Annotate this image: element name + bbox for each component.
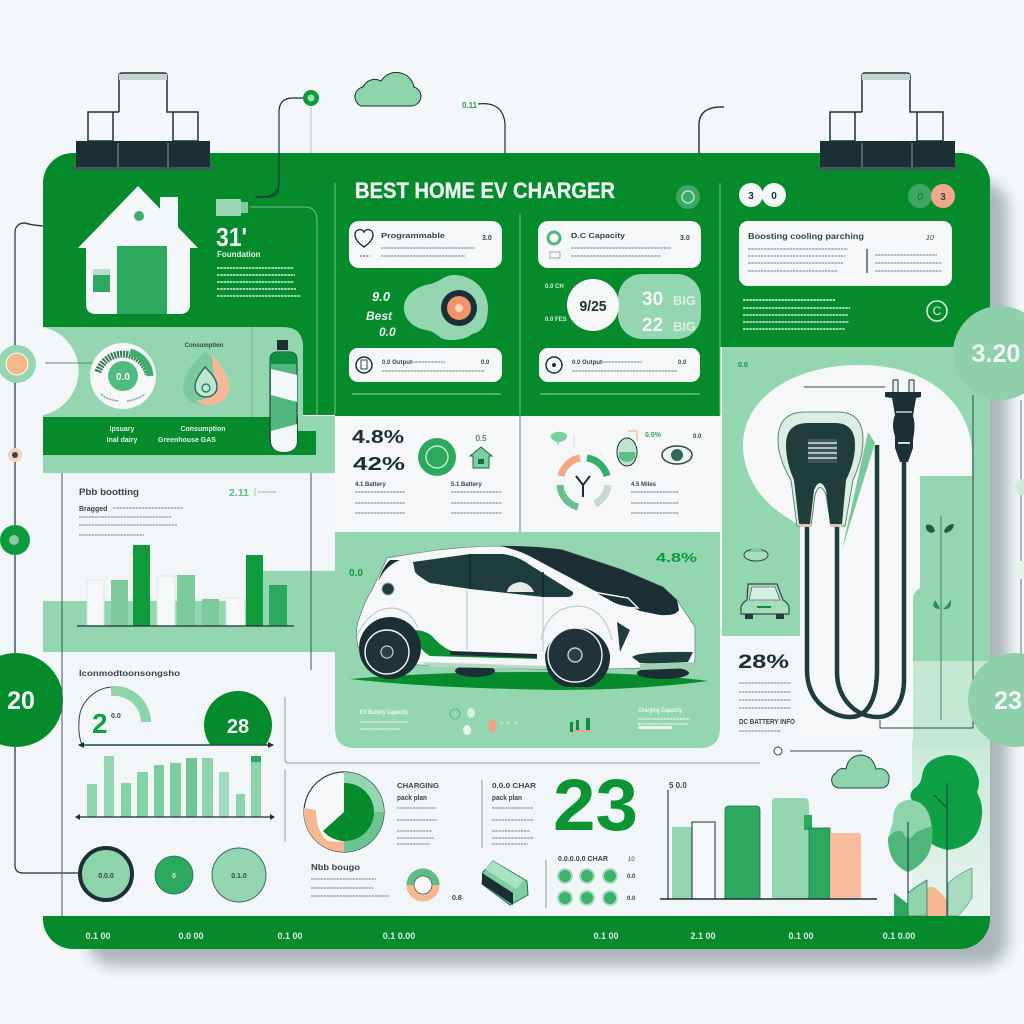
icons: grid of six: [558, 856, 636, 905]
footer labels: 0.1 0.00: [883, 931, 915, 941]
stat pill: charge values: 9/25: [580, 298, 606, 315]
text: car notes left: EV Battery Capacity: [360, 710, 409, 716]
panel: stats left white: 5.1 Battery: [451, 482, 482, 488]
panel: stats left white: [335, 416, 519, 532]
text: donut legend: CHARGING: [397, 783, 440, 790]
badge: 20 left: 20: [7, 687, 35, 715]
chart: top left bar chart: Bragged: [79, 506, 107, 513]
panel: stats left white: 42%: [353, 454, 405, 474]
stat pill: charge values: [545, 274, 701, 339]
icons: grid of six: 0.0: [627, 896, 636, 902]
icon: battery bottle: [270, 340, 297, 452]
clamp: left: [72, 73, 215, 170]
text: donut legend: pack plan: [397, 795, 427, 802]
card: top right: 3.0: [680, 235, 690, 242]
stat: house figure: [216, 222, 301, 296]
icon: house: [78, 186, 198, 314]
card: top right: D.C Capacity: [571, 233, 625, 240]
card: top right: [538, 221, 701, 268]
connector: left timeline: [0, 223, 78, 873]
icon: small car: [744, 548, 768, 561]
text: car notes left: [360, 710, 409, 729]
card: mid left: 0.0: [481, 360, 490, 366]
blob: charge indicator: 9.0: [372, 289, 391, 304]
chart: small ring: [410, 872, 462, 902]
stat: house figure: Foundation: [217, 250, 261, 259]
chart: top left bar chart: 2.11: [229, 488, 249, 499]
stat: 23: 23: [553, 765, 638, 846]
panel: stats right white: 0.0: [693, 434, 702, 440]
icon: trees: [888, 755, 982, 916]
circles: three stats: [80, 848, 266, 902]
card: right top: [739, 221, 952, 286]
footer labels: 0.0 00: [178, 931, 204, 941]
circles: three stats: 0.1.0: [231, 873, 247, 880]
divider lines: green area: [335, 183, 720, 415]
panel: stats left white: 0.5: [475, 434, 487, 443]
panel: car section: [335, 532, 720, 748]
chart: small ring: 0.8: [452, 895, 462, 902]
connector: right node line: [1014, 400, 1024, 660]
clamp: right: [817, 73, 958, 170]
panel: green label band: [43, 416, 335, 455]
stat: 28%: 28%: [738, 652, 789, 673]
gauge: half circle and value: 28: [227, 716, 249, 738]
footer labels: 0.1 00: [277, 931, 303, 941]
badge: 23 right: [968, 653, 1024, 747]
card: top left: Programmable: [381, 233, 445, 240]
chart: top left bar chart: [77, 487, 294, 626]
hr: [352, 393, 700, 395]
stat pill: charge values: 22: [642, 315, 663, 336]
stat pill: charge values: 0.0 CH: [545, 284, 564, 290]
icon: bottom cloud: [832, 755, 889, 788]
panel: charger illustration: 0.0: [738, 362, 748, 369]
panel: top right green badges: 3: [748, 191, 754, 202]
text: car notes right: Charging Capacity: [638, 708, 683, 714]
stat pill: charge values: 0.0 FES: [545, 317, 567, 323]
text: small note: Nbb bougo: [311, 863, 360, 872]
panel: charger illustration: [738, 362, 990, 755]
badge: 3.20: [953, 306, 1024, 400]
badge: 3.20: 3.20: [972, 340, 1020, 368]
icons: grid of six: 0.0: [627, 874, 636, 880]
panel: stats left white: 4.8%: [352, 427, 404, 447]
title: BEST HOME EV CHARGER: [355, 178, 615, 203]
connector: top center: [478, 104, 505, 153]
icons: grid of six: 0.0.0.0.0 CHAR: [558, 856, 608, 863]
chart: right bar chart: 5 0.0: [669, 781, 687, 790]
gauge: speed dial: [560, 458, 608, 507]
gauge: half circle and value: 2: [92, 708, 108, 739]
gauge dial: [90, 343, 156, 409]
stat: 28%: DC BATTERY INFO: [739, 719, 795, 726]
panel: green label band: Inal dairy: [107, 437, 137, 444]
panel: main card: [43, 153, 990, 949]
lines: left section rules: [62, 473, 311, 916]
panel: stats right white: 4.5 Miles: [631, 482, 657, 488]
gauge: half circle and value: [78, 686, 274, 748]
card: top left: 3.0: [482, 235, 492, 242]
panel: car section: 4.8%: [656, 550, 698, 565]
icon: battery block: [482, 861, 528, 905]
card: mid right: 0.0 Output: [572, 360, 602, 366]
text: second legend: [492, 783, 536, 844]
icon: front car: [741, 584, 789, 619]
lines: bottom section rules: [285, 697, 760, 908]
panel: top right green badges: [739, 183, 955, 208]
footer labels: 0.1 00: [788, 931, 814, 941]
circles: three stats: 0.0.0: [98, 873, 114, 880]
icon: energy drop: [183, 343, 229, 405]
chart: lower left bar chart: [75, 756, 275, 820]
icon: title badge: [676, 185, 700, 209]
panel: top right green badges: 0: [917, 192, 923, 203]
chart: donut: [304, 772, 384, 852]
card: mid right: [539, 348, 700, 382]
blob: charge indicator: Best: [366, 309, 393, 323]
panel: green label band: Ipsuary: [110, 426, 135, 433]
stat pill: charge values: BIG: [673, 319, 696, 334]
chart: right bar chart: [660, 781, 877, 900]
chart: top left bar chart: Pbb bootting: [79, 487, 139, 497]
gauge: half circle and value: 0.0: [111, 713, 121, 720]
footer labels: 0.1 0.00: [383, 931, 415, 941]
text: small note: [311, 863, 389, 896]
icon: wall plug: [216, 189, 317, 415]
panel: stats right white: 0.0%: [645, 432, 662, 439]
icons: grid of six: 10: [628, 857, 635, 863]
panel: stats right white: [520, 416, 720, 532]
panel: top right green badges: 3: [940, 192, 946, 203]
footer labels: 0.1 00: [593, 931, 619, 941]
text: car notes right: [638, 708, 690, 729]
label: top number: 0.11: [462, 101, 478, 110]
plug: [885, 380, 921, 462]
connector: top right: [699, 107, 724, 153]
card: top left: [349, 221, 502, 268]
badge: 23 right: 23: [994, 687, 1022, 715]
stat pill: charge values: BIG: [673, 293, 696, 308]
car: [350, 546, 708, 690]
badge: 20 left: [0, 653, 63, 747]
text block: right green: [743, 300, 947, 329]
panel: stats left white: 4.1 Battery: [355, 482, 386, 488]
stat: house figure: 31': [216, 222, 247, 252]
gauge dial: 0.0: [116, 372, 130, 383]
footer labels: [85, 931, 915, 941]
charger head: [778, 412, 863, 527]
footer labels: 0.1 00: [85, 931, 111, 941]
icon: energy drop: Consumption: [185, 343, 224, 349]
card: mid left: 0.0 Output: [382, 360, 412, 366]
icons: car notes center: [450, 708, 590, 735]
footer labels: 2.1 00: [690, 931, 716, 941]
card: right top: 10: [926, 235, 934, 242]
panel: green label band: Greenhouse GAS: [158, 437, 216, 444]
text: second legend: pack plan: [492, 795, 522, 802]
text block: right green: C: [933, 304, 942, 318]
page shadow: [88, 182, 1008, 966]
heading: mid left: Iconmodtoonsongsho: [79, 669, 180, 678]
card: right top: Boosting cooling parching: [748, 232, 864, 241]
connector: green node top: [256, 90, 319, 197]
icon: top cloud: [355, 72, 421, 106]
panel: top right green badges: 0: [771, 191, 777, 202]
panel: mint gauge band: [43, 327, 303, 417]
panel: car section: 0.0: [349, 568, 363, 579]
blob: charge indicator: [366, 275, 488, 340]
text: donut legend: [397, 783, 440, 844]
cable: [807, 445, 904, 717]
card: mid right: 0.0: [678, 360, 687, 366]
blob: charge indicator: 0.0: [379, 325, 396, 339]
stat: 28%: [738, 652, 862, 755]
circles: three stats: 0: [172, 873, 176, 880]
text: second legend: 0.0.0 CHAR: [492, 783, 536, 790]
stat pill: charge values: 30: [642, 289, 663, 310]
panel: green label band: Consumption: [180, 426, 226, 433]
card: mid left: [349, 348, 502, 382]
